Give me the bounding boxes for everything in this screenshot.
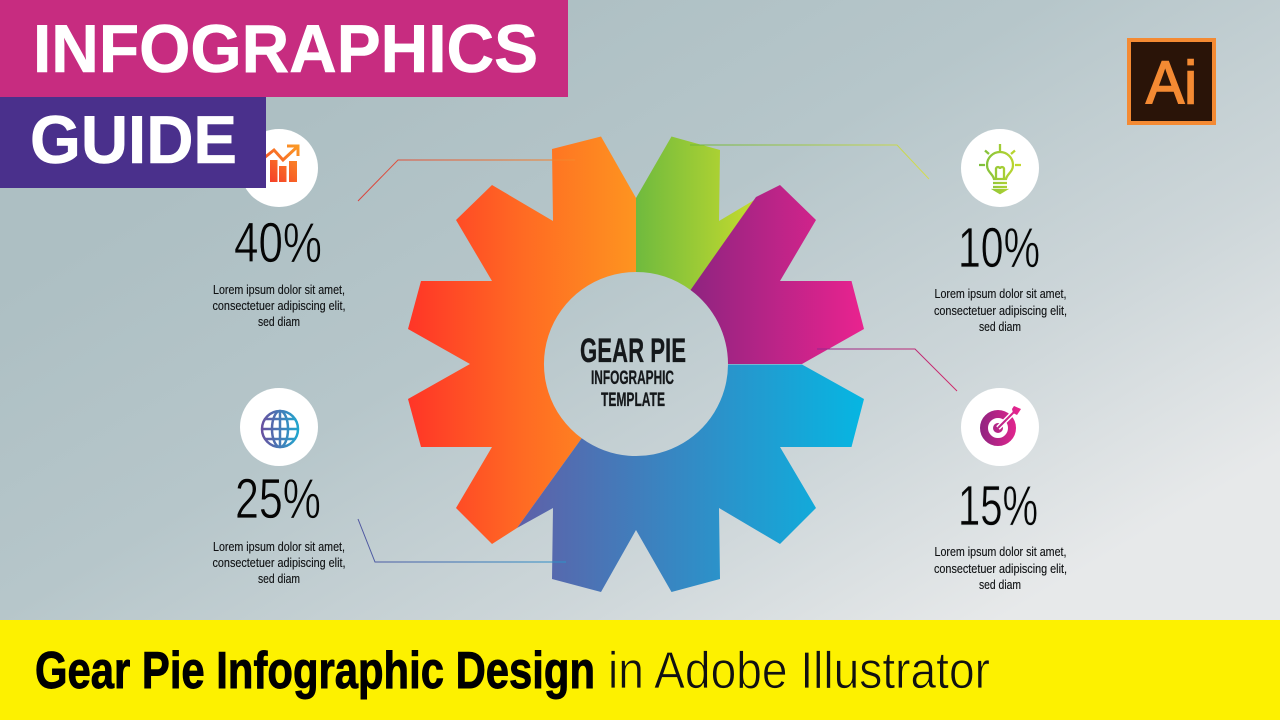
connector: magenta 15% bbox=[817, 349, 957, 391]
stat: 40% bbox=[212, 211, 346, 329]
center label: INFOGRAPHIC bbox=[591, 367, 674, 389]
segment: magenta 15% bbox=[690, 185, 864, 364]
stat: 10% bbox=[934, 216, 1067, 334]
stat: 15% bbox=[934, 474, 1067, 592]
gear pie chart bbox=[408, 136, 864, 592]
icon: rising bar chart bbox=[240, 129, 318, 207]
stat: 10%: Lorem ipsum dolor sit amet, bbox=[934, 287, 1066, 301]
segment: orange 40% bbox=[408, 136, 636, 544]
stat: 15%: 15% bbox=[958, 474, 1038, 538]
stat: 40%: 40% bbox=[234, 211, 322, 275]
logo: Adobe Illustrator bbox=[1129, 40, 1214, 123]
stat: 10%: sed diam bbox=[979, 320, 1021, 334]
stat: 10%: consectetuer adipiscing elit, bbox=[934, 304, 1067, 318]
stat: 10%: 10% bbox=[958, 216, 1040, 280]
segment: green 10% bbox=[636, 136, 756, 290]
footer title bar: Gear Pie Infographic Design bbox=[35, 642, 595, 700]
stat: 40%: Lorem ipsum dolor sit amet, bbox=[213, 283, 345, 297]
segment: blue 25% bbox=[517, 364, 864, 592]
logo: Adobe Illustrator: Ai bbox=[1146, 49, 1197, 116]
footer title bar bbox=[0, 620, 1280, 720]
stat: 15%: Lorem ipsum dolor sit amet, bbox=[934, 545, 1066, 559]
stat: 25%: 25% bbox=[235, 467, 321, 531]
stat: 40%: sed diam bbox=[258, 315, 300, 329]
connector: orange 40% bbox=[358, 160, 575, 201]
icon: globe bbox=[240, 388, 318, 466]
stat: 25% bbox=[212, 467, 346, 586]
connector: green 10% bbox=[690, 145, 929, 179]
center label bbox=[580, 332, 686, 411]
banner: GUIDE: GUIDE bbox=[30, 102, 237, 178]
banner: INFOGRAPHICS: INFOGRAPHICS bbox=[33, 11, 538, 87]
stat: 25%: Lorem ipsum dolor sit amet, bbox=[213, 540, 345, 554]
center label: TEMPLATE bbox=[601, 389, 665, 411]
center label: GEAR PIE bbox=[580, 332, 686, 370]
icon: target with arrow bbox=[961, 388, 1039, 466]
banner: GUIDE bbox=[0, 97, 266, 188]
connector: blue 25% bbox=[358, 519, 566, 562]
stat: 25%: consectetuer adipiscing elit, bbox=[212, 556, 346, 570]
stat: 15%: consectetuer adipiscing elit, bbox=[934, 562, 1067, 576]
stat: 15%: sed diam bbox=[979, 578, 1021, 592]
footer title bar: in Adobe Illustrator bbox=[608, 642, 990, 700]
stat: 25%: sed diam bbox=[258, 572, 300, 586]
icon: light bulb bbox=[961, 129, 1039, 207]
stat: 40%: consectetuer adipiscing elit, bbox=[212, 299, 346, 313]
